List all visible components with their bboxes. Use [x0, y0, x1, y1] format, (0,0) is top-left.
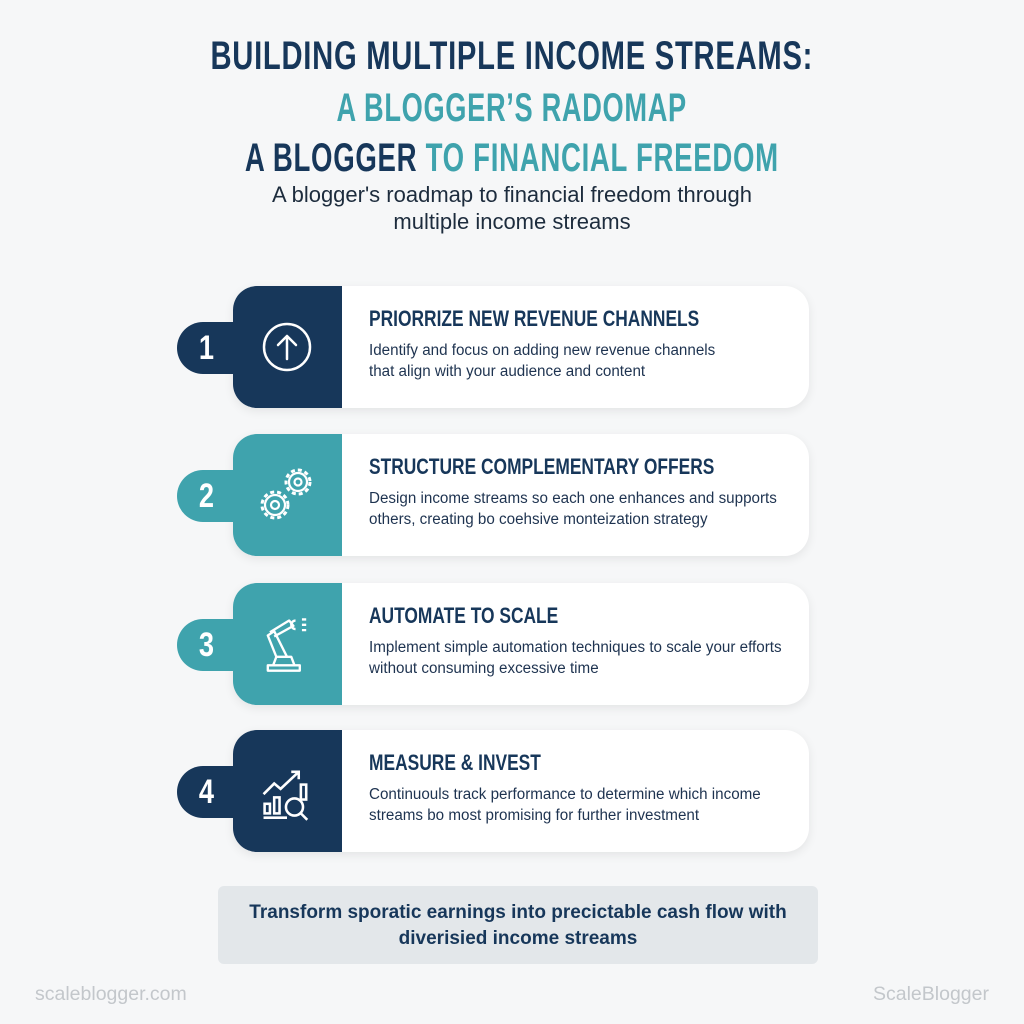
card 4 — [177, 730, 810, 856]
footer left: scaleblogger.com — [35, 983, 187, 1005]
title — [211, 34, 813, 180]
icon: chart with magnifier — [262, 770, 308, 821]
footer right: ScaleBlogger — [873, 983, 989, 1005]
icon: arrow up circle — [262, 322, 312, 372]
card 4: Continuouls track performance to determine which income — [369, 786, 761, 803]
card 4: MEASURE & INVEST — [369, 750, 541, 775]
title: A BLOGGER TO FINANCIAL FREEDOM — [245, 136, 779, 180]
card 3: without consuming excessive time — [369, 660, 599, 677]
title: A BLOGGER’S RADOMAP — [337, 86, 687, 130]
callout — [218, 886, 818, 964]
card 2 — [177, 434, 810, 560]
card 3: AUTOMATE TO SCALE — [369, 603, 558, 628]
card 1: PRIORRIZE NEW REVENUE CHANNELS — [369, 306, 699, 331]
card 1: 1 — [199, 329, 214, 367]
callout: Transform sporatic earnings into precictable cash flow with — [249, 902, 787, 923]
icon: gears — [260, 468, 312, 520]
card 2: Design income streams so each one enhances and supports — [369, 490, 777, 507]
card 1: that align with your audience and content — [369, 363, 645, 380]
card 3: Implement simple automation techniques to scale your efforts — [369, 639, 782, 656]
subtitle: multiple income streams — [393, 209, 631, 234]
card 2: others, creating bo coehsive monteization strategy — [369, 511, 708, 528]
card 3 — [177, 583, 810, 708]
card 4: streams bo most promising for further investment — [369, 807, 699, 824]
card 2: 2 — [199, 477, 214, 515]
title: BUILDING MULTIPLE INCOME STREAMS: — [211, 34, 813, 78]
callout: diverisied income streams — [399, 928, 637, 949]
subtitle — [272, 182, 752, 234]
card 4: 4 — [199, 773, 214, 811]
icon: robot arm — [266, 618, 306, 672]
card 3: 3 — [199, 626, 214, 664]
card 1: Identify and focus on adding new revenue channels — [369, 342, 715, 359]
card 2: STRUCTURE COMPLEMENTARY OFFERS — [369, 454, 714, 479]
subtitle: A blogger's roadmap to financial freedom through — [272, 182, 752, 207]
card 1 — [177, 286, 810, 412]
